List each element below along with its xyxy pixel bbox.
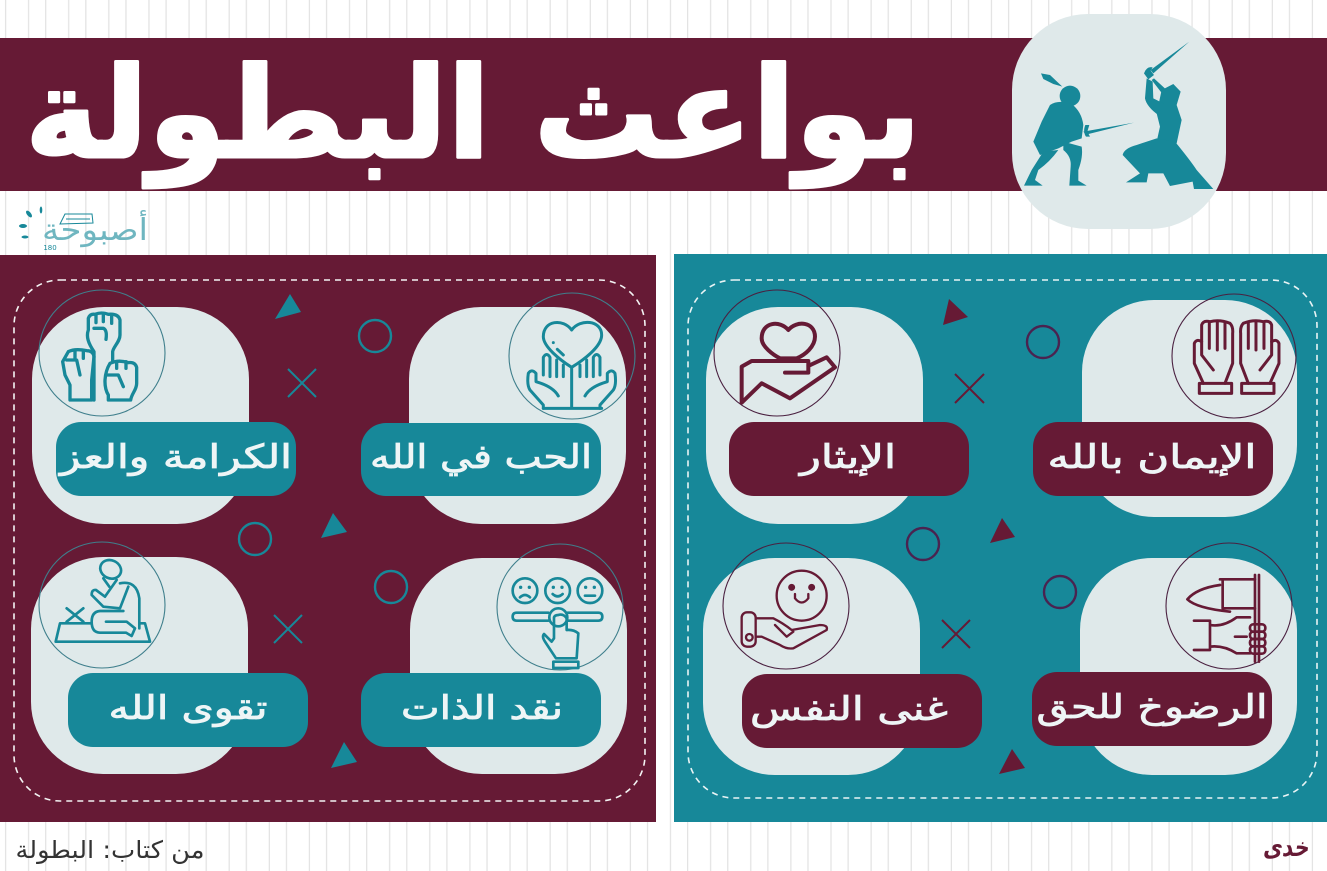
card: الحب في الله bbox=[361, 293, 635, 524]
label text: الإيمان بالله bbox=[1048, 437, 1256, 476]
decorative shapes bbox=[239, 294, 407, 768]
logo: Asbuha 180: أصبوحة bbox=[42, 209, 148, 248]
icon: heart in hands bbox=[528, 322, 616, 408]
label pill bbox=[1032, 672, 1272, 746]
label text: الحب في الله bbox=[370, 437, 592, 476]
logo: Asbuha 180 bbox=[19, 206, 148, 252]
icon: fencing fighters badge bbox=[1012, 14, 1226, 229]
card: تقوى الله bbox=[31, 542, 308, 774]
label pill bbox=[729, 422, 969, 496]
signature mark: خدى bbox=[1262, 833, 1312, 863]
label text: تقوى الله bbox=[108, 688, 268, 727]
icon: rating faces and hand bbox=[513, 578, 602, 668]
label text: الرضوخ للحق bbox=[1036, 687, 1268, 727]
icon: hand holding flag bbox=[1187, 575, 1265, 662]
label pill bbox=[361, 423, 601, 496]
icon: praying man bbox=[56, 557, 150, 642]
label text: نقد الذات bbox=[401, 688, 563, 727]
card: الكرامة والعز bbox=[32, 290, 296, 524]
icon: raised praying hands bbox=[1194, 321, 1279, 393]
label pill bbox=[68, 673, 308, 747]
label pill bbox=[56, 422, 296, 496]
panel: teal right bbox=[674, 254, 1327, 822]
decorative shapes bbox=[907, 299, 1076, 774]
label pill bbox=[742, 674, 982, 748]
card: نقد الذات bbox=[361, 544, 627, 774]
label text: الكرامة والعز bbox=[57, 437, 292, 476]
icon: heart on hand bbox=[742, 324, 835, 403]
icon: raised fists bbox=[63, 313, 137, 400]
card: الإيثار bbox=[706, 290, 969, 524]
label text: غنى النفس bbox=[750, 689, 948, 728]
source note: من كتاب: البطولة bbox=[16, 836, 204, 864]
label text: الإيثار bbox=[797, 437, 896, 476]
header band bbox=[0, 38, 1327, 191]
icon: smile on hand bbox=[742, 571, 827, 649]
logo: Asbuha 180: 180 bbox=[43, 244, 57, 252]
card: الرضوخ للحق bbox=[1032, 543, 1297, 775]
label pill bbox=[361, 673, 601, 747]
label pill bbox=[1033, 422, 1273, 496]
title: بواعث البطولة bbox=[25, 40, 921, 188]
card: الإيمان بالله bbox=[1033, 294, 1297, 517]
card: غنى النفس bbox=[703, 543, 982, 775]
panel: maroon left bbox=[0, 255, 656, 822]
